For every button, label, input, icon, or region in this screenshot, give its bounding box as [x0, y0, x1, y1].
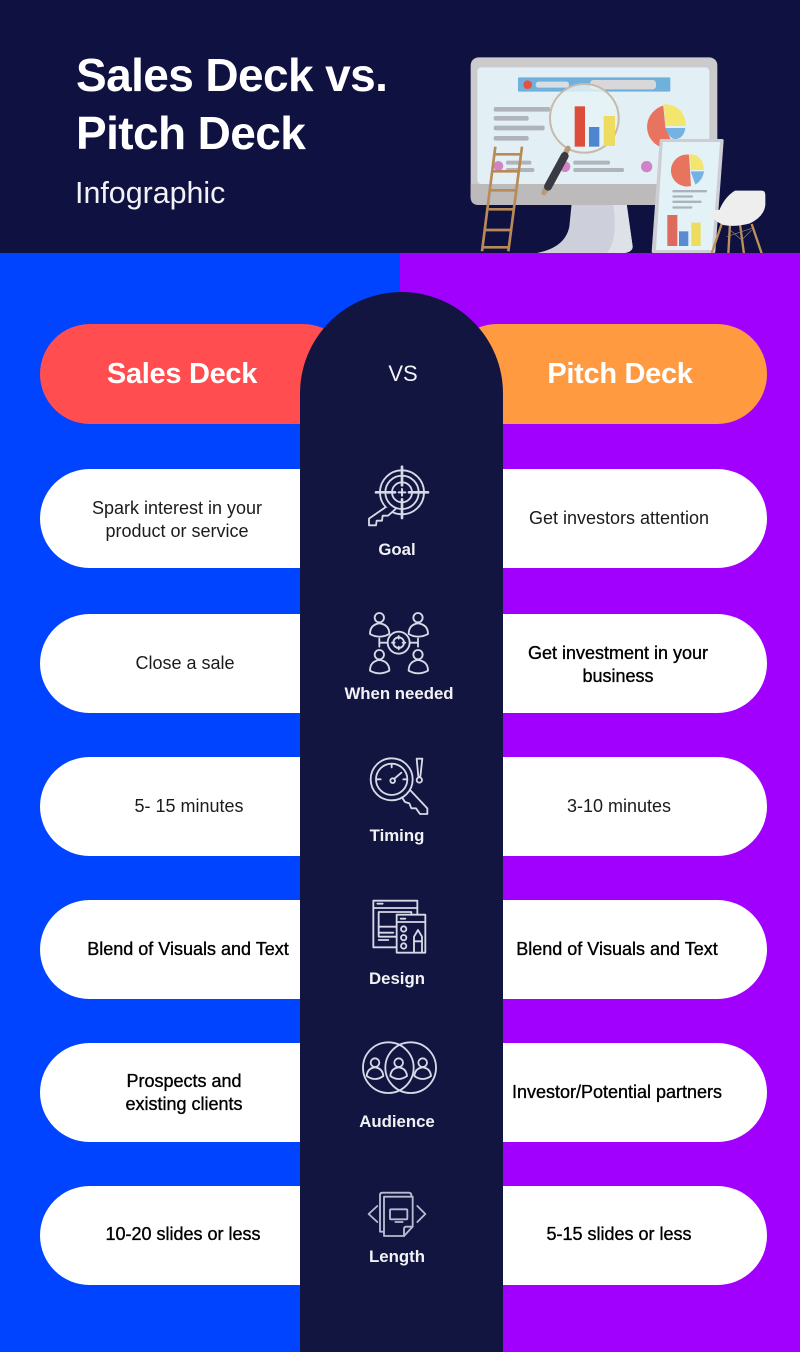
text: goal sales: Spark interest in your — [92, 498, 262, 518]
row 2 left pill — [40, 614, 353, 713]
header pill: Sales Deck — [40, 324, 353, 424]
row 3 right pill — [447, 757, 767, 856]
text: length sales: 10-20 slides or less — [105, 1224, 261, 1244]
text: audience pitch: Investor/Potential partners — [512, 1082, 722, 1102]
text: timing sales: 5- 15 minutes — [134, 796, 244, 816]
icon: goal target key — [368, 465, 430, 526]
row 5 right pill — [447, 1043, 767, 1142]
row 4 left pill — [40, 900, 353, 999]
icon: audience venn — [362, 1041, 437, 1094]
icon: team around target — [369, 612, 429, 674]
text: when pitch — [528, 643, 708, 686]
icon: length slides — [368, 1192, 426, 1237]
text: goal pitch: Get investors attention — [529, 508, 709, 528]
row 2 right pill — [447, 614, 767, 713]
title: Pitch Deck — [76, 107, 305, 159]
label: goal: Goal — [378, 540, 416, 559]
text: audience sales: existing clients — [125, 1094, 243, 1114]
row 4 right pill — [447, 900, 767, 999]
text: audience sales: Prospects and — [126, 1071, 242, 1091]
text: design sales: Blend of Visuals and Text — [87, 939, 289, 959]
text: when pitch: business — [582, 666, 654, 686]
icon: design windows — [372, 900, 426, 954]
chair — [712, 224, 762, 254]
label: timing: Timing — [370, 826, 424, 845]
row 5 left pill — [40, 1043, 353, 1142]
text: goal sales: product or service — [105, 521, 249, 541]
text: length pitch: 5-15 slides or less — [546, 1224, 692, 1244]
row 6 left pill — [40, 1186, 353, 1285]
row 6 right pill — [447, 1186, 767, 1285]
illustration: monitor, magnifier, tablet, ladder, chair — [470, 57, 766, 253]
label: audience: Audience — [359, 1112, 435, 1131]
text: design pitch: Blend of Visuals and Text — [516, 939, 718, 959]
label: when needed: When needed — [344, 684, 454, 703]
label: Pitch Deck: Pitch Deck — [547, 358, 693, 390]
header band — [0, 0, 800, 253]
row 1 right pill — [447, 469, 767, 568]
tablet — [653, 141, 722, 251]
text: when sales: Close a sale — [135, 653, 235, 673]
icon: timing gauge key — [370, 757, 428, 815]
text: audience sales — [125, 1071, 243, 1114]
subtitle: Infographic — [75, 176, 225, 210]
text: goal sales — [92, 498, 262, 541]
header pill: Pitch Deck — [447, 324, 767, 424]
title: Sales Deck vs. — [76, 49, 387, 101]
row 3 left pill — [40, 757, 353, 856]
ladder — [482, 147, 522, 251]
right background panel — [400, 253, 800, 1352]
center column — [300, 292, 503, 1352]
magnifier — [550, 84, 619, 153]
label: design: Design — [369, 969, 425, 988]
label: length: Length — [369, 1247, 425, 1266]
text: timing pitch: 3-10 minutes — [567, 796, 671, 816]
label: Sales Deck: Sales Deck — [107, 358, 257, 390]
row 1 left pill — [40, 469, 353, 568]
text: when pitch: Get investment in your — [528, 643, 708, 663]
title — [76, 49, 387, 159]
left background panel — [0, 253, 400, 1352]
vs label: VS — [388, 361, 418, 386]
